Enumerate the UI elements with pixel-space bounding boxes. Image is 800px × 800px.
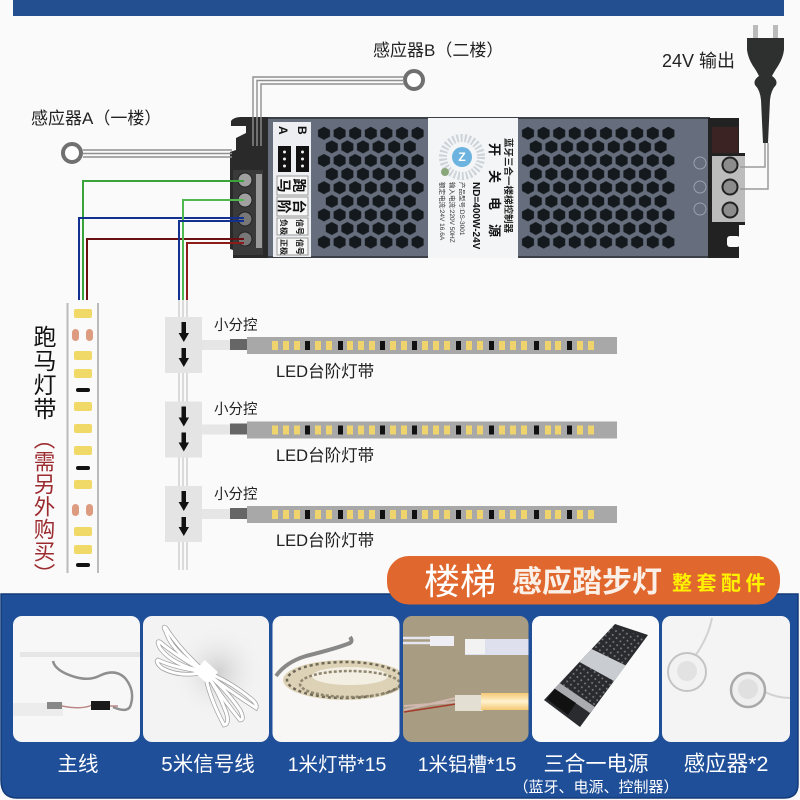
- running LED strip: [68, 303, 98, 573]
- colored wires to step strips: [179, 200, 244, 300]
- sensor A with signal wires: [63, 144, 232, 162]
- heading banner: [387, 556, 780, 604]
- heading: full kit: 整套配件: [672, 572, 770, 595]
- control label panel: 负极: [279, 219, 289, 235]
- step strip group 3: LED台阶灯带: [276, 531, 374, 550]
- plug and power cord: [740, 25, 784, 189]
- panel: kit contents: [1, 594, 798, 798]
- product label: 产品型号:DS-3001: [458, 182, 467, 236]
- distribution trunk wires: [179, 300, 187, 570]
- step strip group 1: LED台阶灯带: [276, 362, 374, 381]
- photo: sensors: [662, 616, 791, 742]
- caption: power supply detail: （蓝牙、电源、控制器）: [513, 779, 679, 796]
- control label panel: 信号: [295, 239, 305, 255]
- photo: main wire: [13, 616, 140, 742]
- PSU metal body: [264, 117, 710, 258]
- label: sensor A: 感应器A（一楼）: [31, 109, 161, 128]
- colored wires to running strip: [79, 181, 244, 300]
- left vent grid: [317, 126, 424, 249]
- caption: main wire: 主线: [58, 753, 98, 776]
- product label: 蓝牙三合一楼梯控制器: [502, 138, 514, 234]
- product label: 输入电流:220V 50HZ: [448, 182, 457, 243]
- control label panel: 阶: [276, 200, 292, 214]
- right terminal block: [694, 118, 745, 258]
- label: 24V output: 24V 输出: [662, 51, 735, 71]
- photo: LED strip coil: [272, 616, 407, 742]
- label: must buy separately: （需另外购买）: [31, 428, 55, 586]
- product label: Z: [458, 150, 466, 164]
- caption: power supply: 三合一电源: [544, 753, 648, 776]
- step strip group 1: [165, 317, 617, 381]
- step strip group 1: 小分控: [214, 317, 258, 334]
- control label panel: 正极: [279, 239, 289, 255]
- product label: [428, 118, 518, 258]
- control label panel: 信号: [295, 219, 305, 235]
- left terminal block: [230, 117, 268, 258]
- caption: strip: 1米灯带*15: [288, 754, 386, 776]
- label: running strip: 跑马灯带: [30, 325, 56, 421]
- caption: sensors: 感应器*2: [684, 752, 768, 776]
- photo: aluminium channel: [403, 616, 531, 742]
- product label: 额定电流:24V 16.6A: [438, 182, 447, 241]
- control label panel: B: [295, 126, 309, 135]
- heading: sensor step light: 感应踏步灯: [512, 566, 662, 599]
- sensor B with signal wires: [253, 71, 423, 146]
- photo: power supply: [532, 616, 659, 742]
- step strip group 2: 小分控: [214, 401, 258, 418]
- photo: signal wire bundle: [143, 616, 269, 742]
- label: sensor B: 感应器B（二楼）: [373, 41, 503, 60]
- heading: stairs: 楼梯: [424, 561, 496, 602]
- product label: 开关电源: [487, 143, 502, 251]
- step strip group 2: LED台阶灯带: [276, 446, 374, 465]
- power supply unit: [230, 117, 745, 258]
- right vent grid: [521, 126, 675, 249]
- step strip group 3: 小分控: [214, 486, 258, 503]
- caption: signal wire: 5米信号线: [161, 753, 255, 776]
- step strip group 3: [165, 486, 617, 550]
- product label: ND=400W-24V: [470, 182, 481, 250]
- control label panel: A: [276, 126, 290, 135]
- control label panel: 马: [276, 178, 292, 192]
- control label panel: 台: [291, 200, 307, 214]
- control label panel: 跑: [291, 178, 307, 192]
- control label panel: [273, 122, 311, 257]
- step strip group 2: [165, 401, 617, 465]
- caption: channel: 1米铝槽*15: [418, 754, 516, 776]
- top blue bar: [13, 0, 784, 16]
